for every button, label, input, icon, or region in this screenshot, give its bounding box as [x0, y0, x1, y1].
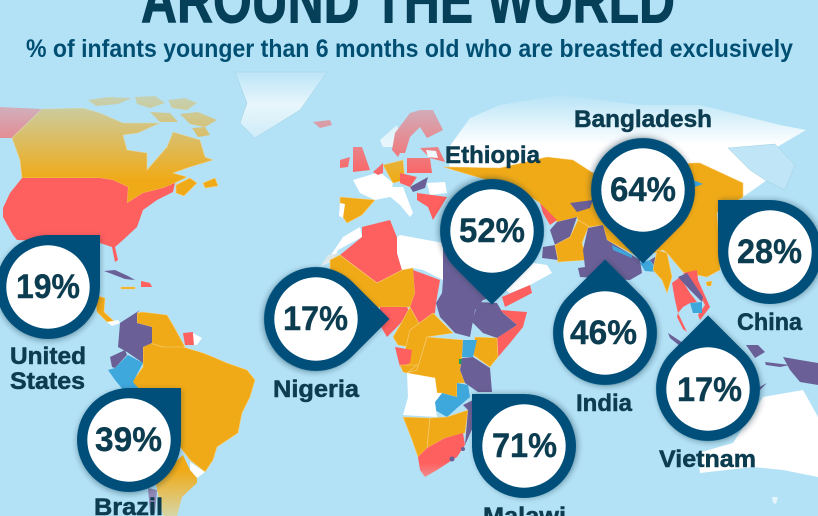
map: South America — [108, 310, 255, 516]
pin: United States — [0, 235, 100, 395]
pin: Vietnam: Vietnam — [659, 446, 756, 473]
pin: United States: States — [10, 368, 85, 395]
map: Europe — [339, 110, 447, 223]
map: Tasmania — [772, 497, 778, 504]
map: Asia — [443, 157, 743, 332]
pin: India: India — [576, 390, 633, 417]
pin: United States: United — [10, 343, 86, 370]
pin: Ethiopia: Ethiopia — [445, 142, 541, 169]
map: North America — [0, 96, 218, 326]
pin: Ethiopia — [418, 142, 566, 305]
pin: Nigeria: 17% — [283, 300, 348, 338]
pin: China — [718, 200, 818, 336]
map: Indonesia and Papua — [668, 333, 818, 392]
pin: China: China — [737, 309, 803, 336]
map: Africa — [320, 220, 527, 477]
pin: Brazil — [77, 388, 181, 516]
map: Sea of Okhotsk — [728, 144, 795, 190]
map: Russia white north — [447, 95, 806, 197]
pin: United States: 19% — [16, 268, 80, 306]
pin: Nigeria: Nigeria — [273, 376, 360, 403]
pin: Ethiopia: 52% — [459, 212, 525, 250]
pin: Bangladesh — [569, 106, 717, 264]
pin: China: 28% — [737, 233, 802, 271]
map: Iceland — [313, 120, 332, 128]
pin: Vietnam: 17% — [677, 371, 742, 409]
pin: Bangladesh: Bangladesh — [574, 106, 712, 133]
map: Greenland — [235, 72, 327, 138]
pin: Nigeria — [242, 245, 390, 403]
pin: Brazil: 39% — [95, 421, 162, 459]
pin: Bangladesh: 64% — [610, 171, 676, 209]
map: Australia — [698, 390, 818, 477]
pin: Malawi — [472, 394, 576, 516]
pin: Vietnam — [634, 315, 782, 473]
pin: India — [531, 259, 679, 417]
arctic fade over western map — [0, 85, 450, 180]
pin: India: 46% — [570, 314, 637, 352]
pin: Malawi: 71% — [492, 427, 557, 465]
